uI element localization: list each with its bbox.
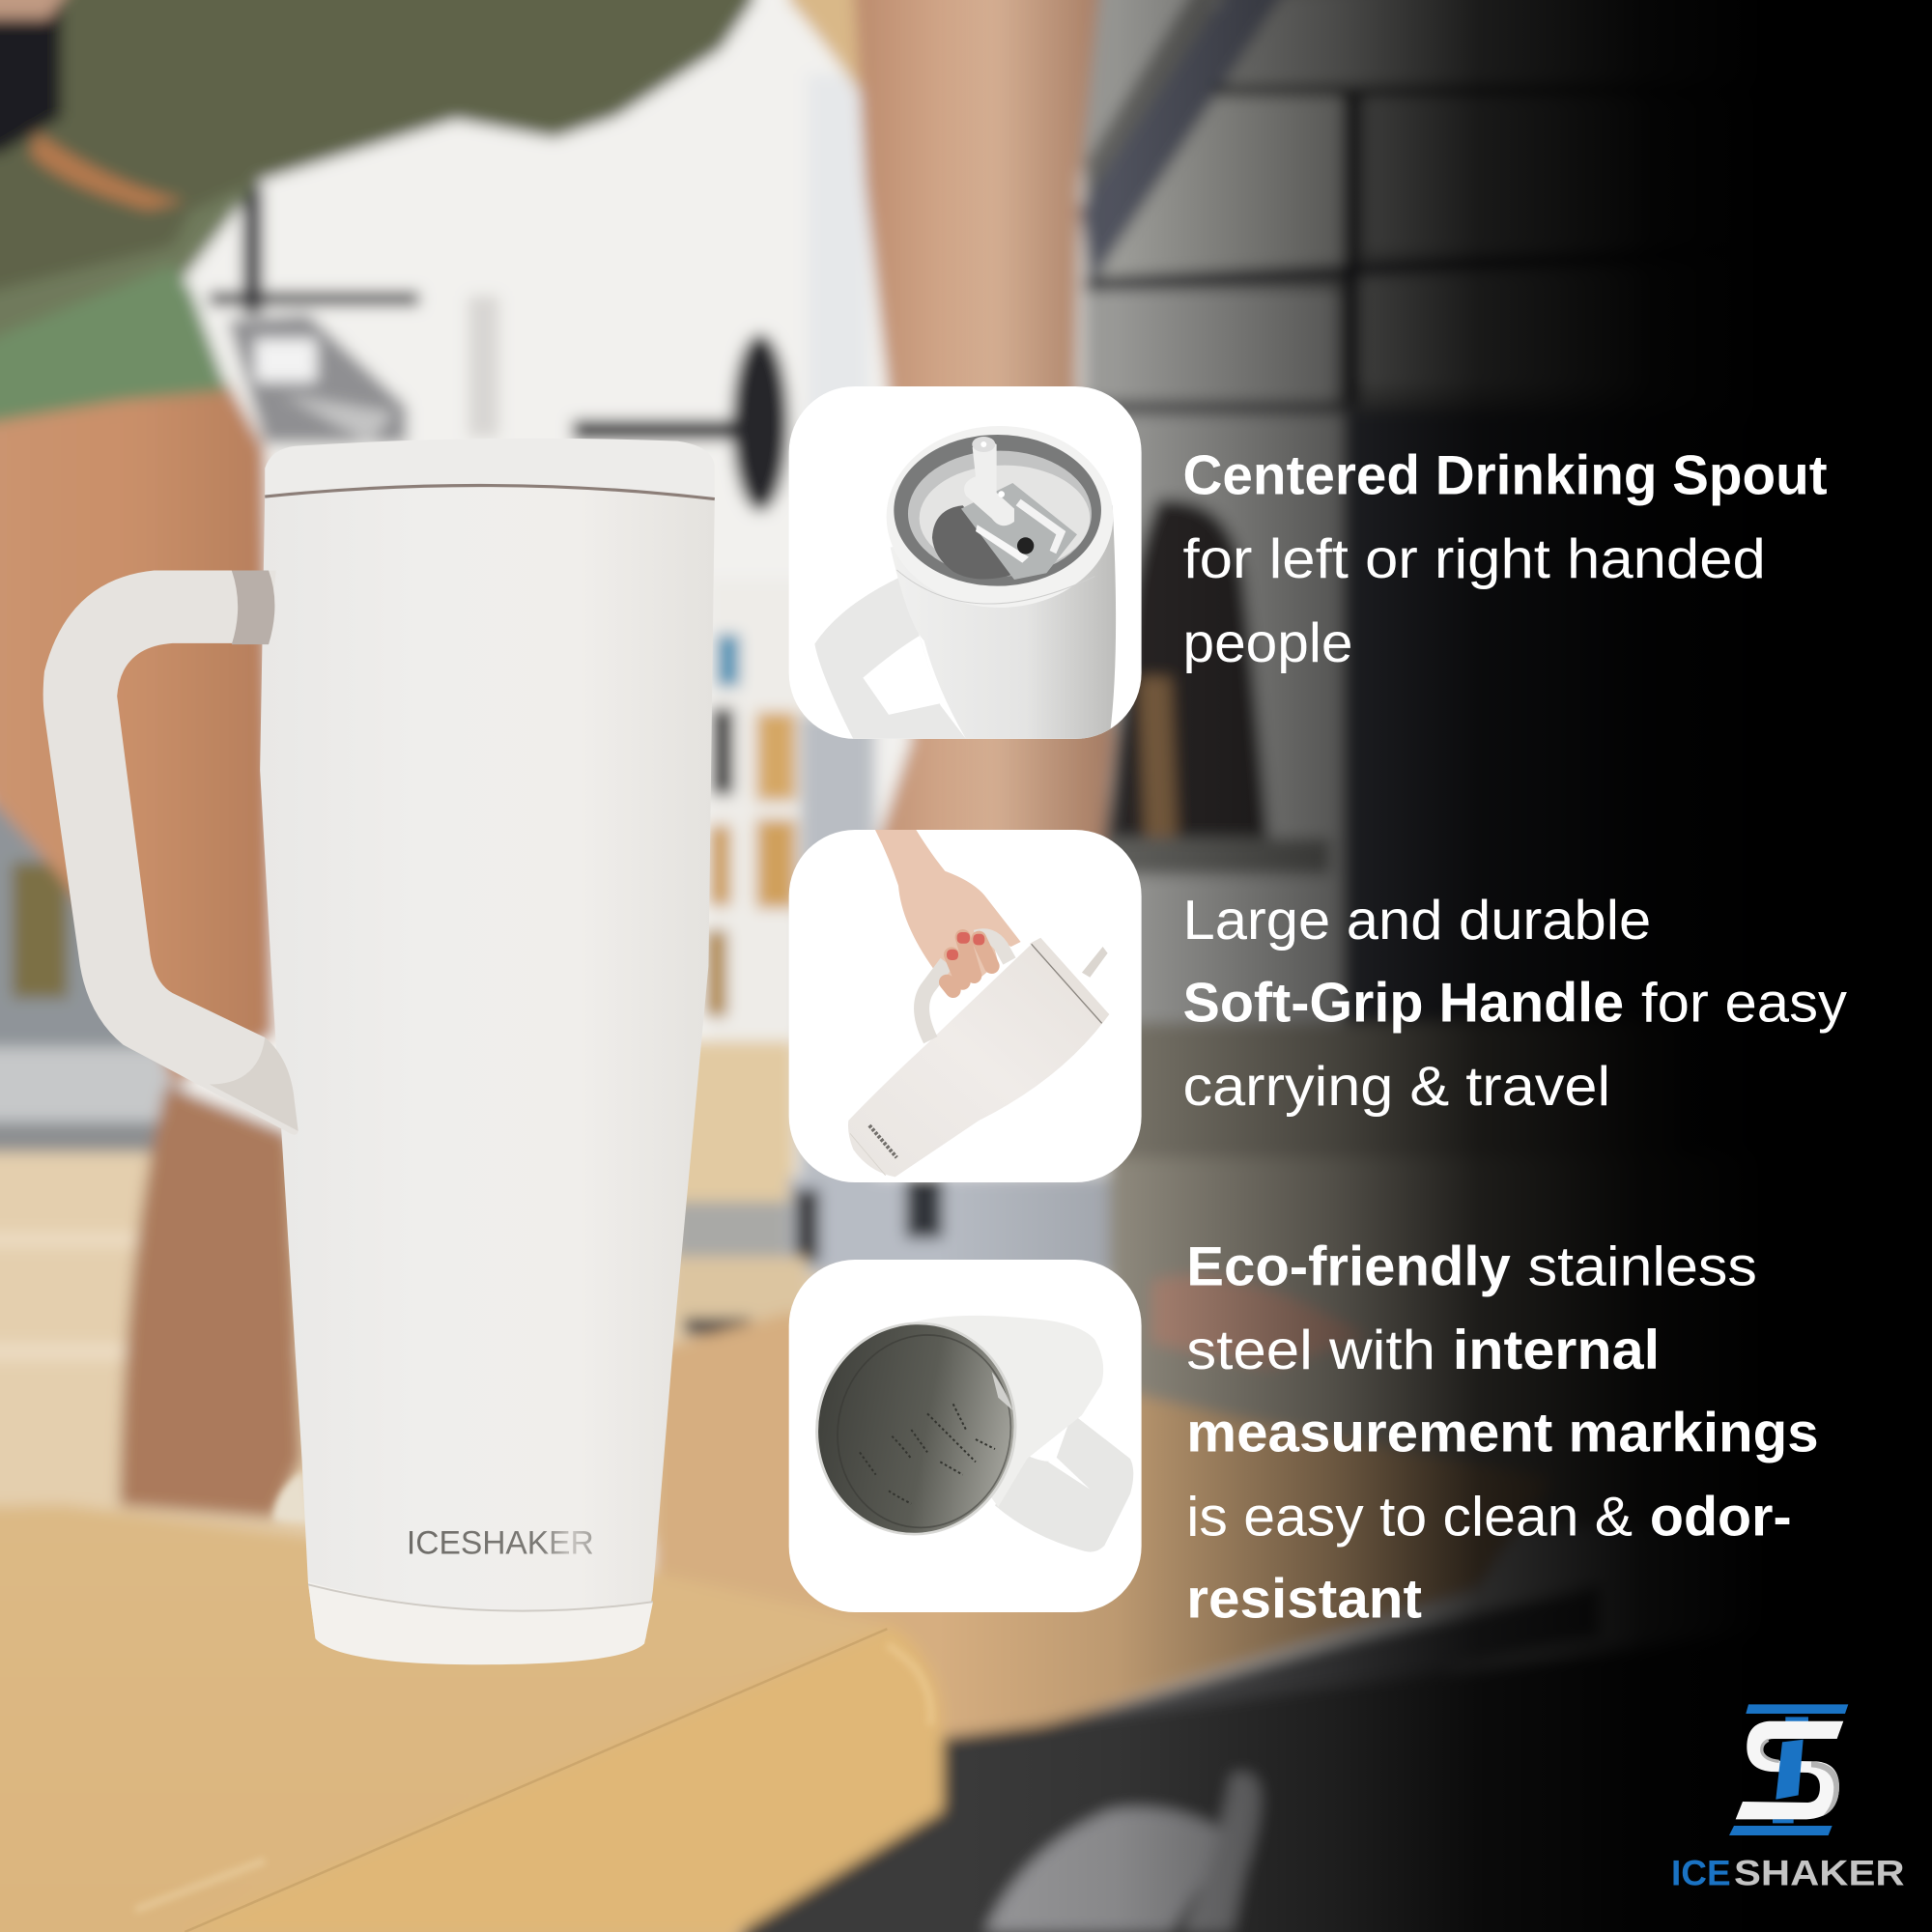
text block: eco-friendly stainless steel: resistant (1186, 1569, 1422, 1631)
text block: eco-friendly stainless steel: measurement markings (1186, 1403, 1819, 1464)
logo wordmark (1671, 1853, 1905, 1892)
mug brand wordmark: ICESHAKER (407, 1524, 594, 1561)
text block: soft-grip handle: carrying & travel (1182, 1056, 1610, 1118)
text block: soft-grip handle: Soft-Grip Handle (1182, 972, 1624, 1034)
text block: soft-grip handle: for easy (1641, 972, 1847, 1034)
shelves (708, 579, 863, 1195)
text block: eco-friendly stainless steel: stainless (1528, 1236, 1757, 1297)
person figure (542, 0, 754, 52)
text block: eco-friendly stainless steel: Eco-friendly (1186, 1236, 1511, 1297)
logo wordmark: ICE (1671, 1853, 1731, 1892)
tumbler base (308, 1582, 653, 1664)
text block: centered drinking spout (1182, 444, 1828, 674)
text block: eco-friendly stainless steel (1186, 1236, 1819, 1631)
white rounded tile 1 (789, 386, 1142, 739)
white rounded tile 2 (789, 830, 1142, 1182)
tumbler lid (265, 439, 715, 497)
main product: white tumbler with handle (43, 439, 715, 1664)
right wall (1084, 0, 1932, 1158)
shoe detail (273, 1471, 310, 1523)
text block: soft-grip handle (1182, 890, 1847, 1118)
text block: centered drinking spout: people (1182, 612, 1353, 674)
tumbler handle (43, 571, 298, 1135)
logo wordmark: SHAKER (1734, 1853, 1905, 1892)
text block: centered drinking spout: for left or right handed (1182, 528, 1766, 590)
text block: eco-friendly stainless steel: internal (1453, 1320, 1660, 1381)
white rounded tile 3 (789, 1260, 1142, 1612)
icon: hand carrying tumbler (789, 830, 1142, 1182)
benches (653, 1312, 1552, 1756)
floor right (1084, 1023, 1676, 1158)
logo: Iceshaker (1671, 1704, 1905, 1892)
icon: centered drinking spout (789, 386, 1142, 739)
text block: eco-friendly stainless steel: steel with (1186, 1320, 1435, 1381)
text block: eco-friendly stainless steel: is easy to clean & (1186, 1486, 1633, 1548)
logo mark (1729, 1704, 1848, 1835)
dark gradient overlay (936, 0, 1932, 1932)
text block: eco-friendly stainless steel: odor- (1650, 1486, 1792, 1548)
text block: soft-grip handle: Large and durable (1182, 890, 1651, 952)
icon: tumbler interior with markings (789, 1260, 1142, 1612)
bench stitching (185, 1629, 887, 1932)
rack (242, 185, 263, 314)
tumbler body (260, 485, 715, 1638)
text block: centered drinking spout: Centered Drinking Spout (1182, 444, 1828, 506)
